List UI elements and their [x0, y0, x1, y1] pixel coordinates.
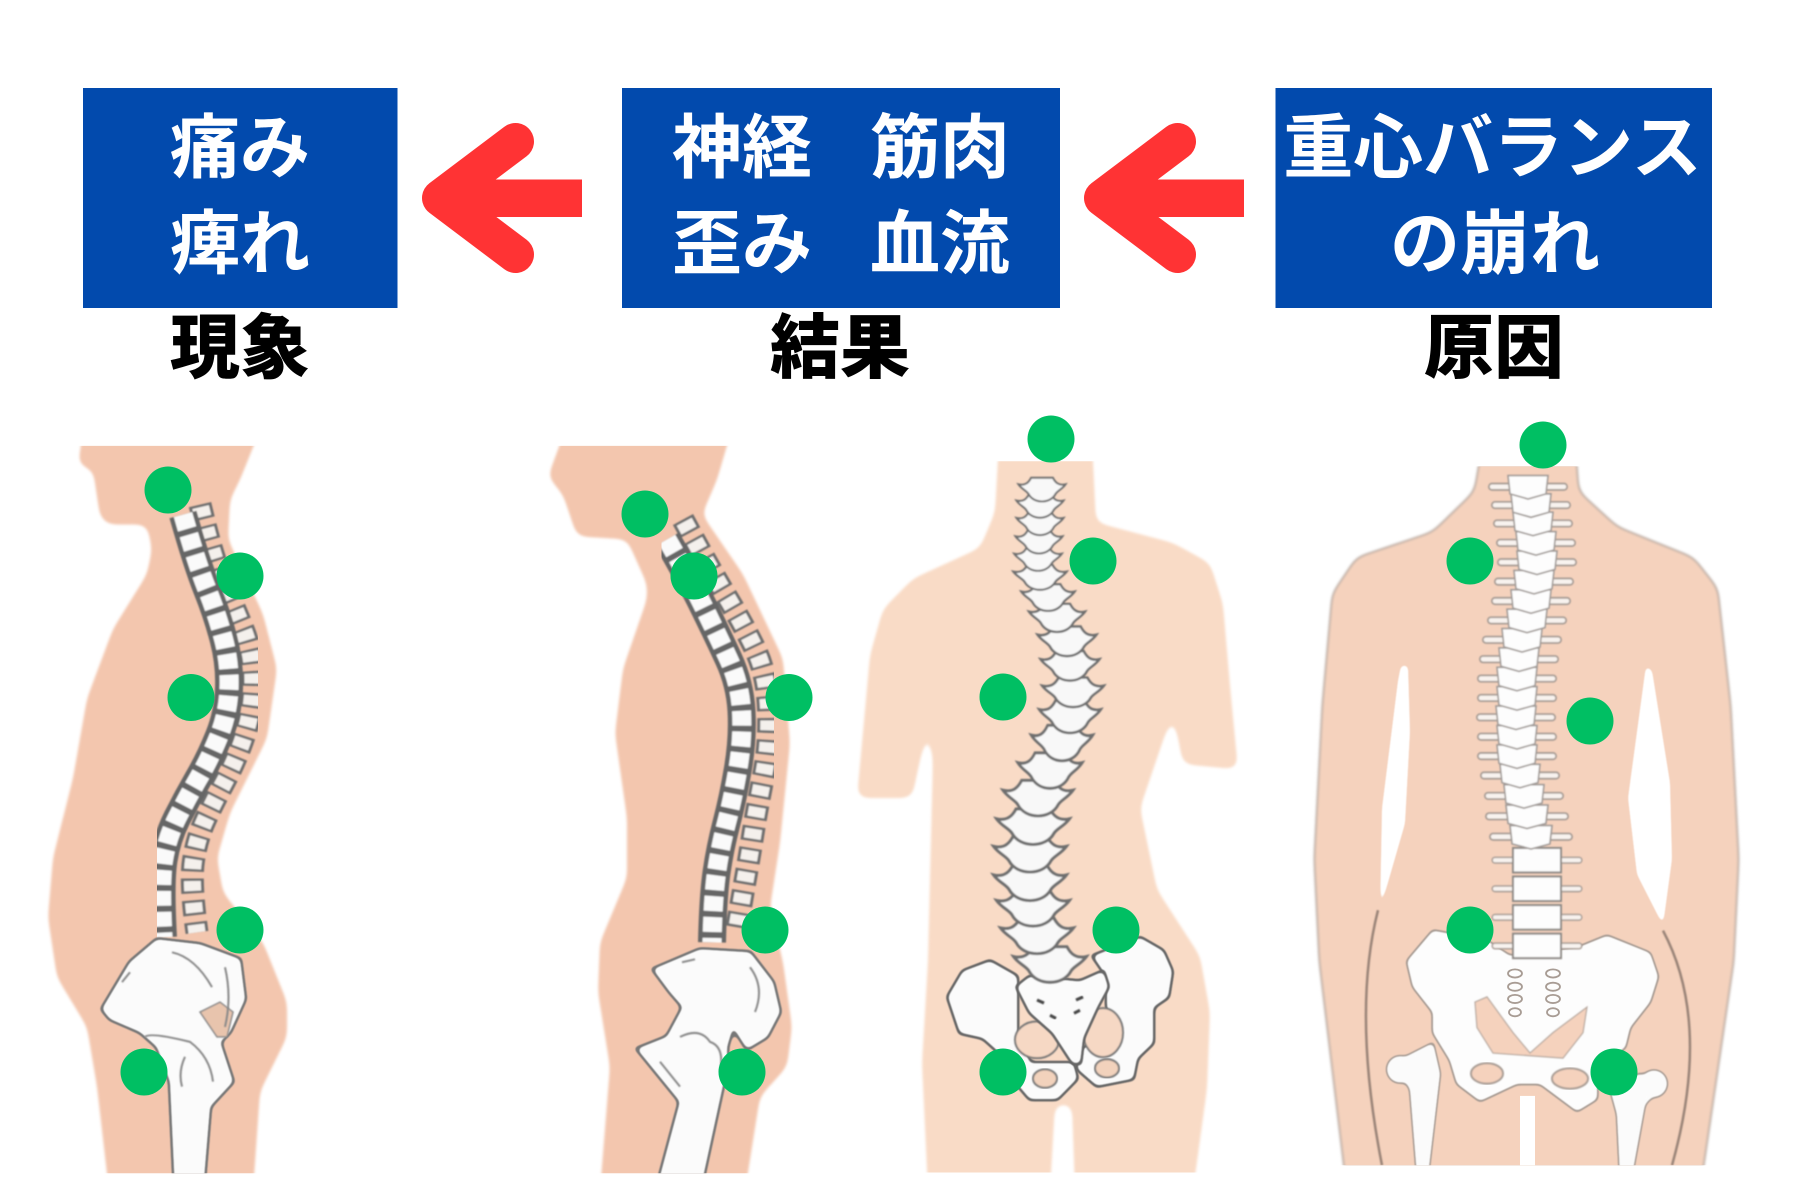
pelvis and femurs [1387, 931, 1667, 1176]
spine [162, 505, 253, 937]
arrow: result to phenomenon [440, 142, 582, 254]
box: result [622, 88, 1060, 308]
text: collapse: の崩れ [1390, 205, 1600, 283]
markers: green dots, figure 2 [622, 490, 812, 1096]
text: nerve, muscle [672, 109, 1010, 187]
text: distortion, blood flow [672, 205, 1010, 283]
body silhouette [1315, 451, 1738, 1186]
arrow: cause to result [1102, 142, 1244, 254]
markers: green dots, figure 1 [120, 466, 264, 1096]
figure: side view, sway back [48, 425, 287, 1191]
box: cause [1276, 88, 1712, 308]
text: nerve, muscle: 神経 [672, 109, 812, 187]
spine [994, 478, 1104, 982]
pelvis and femur [102, 939, 245, 1191]
text: distortion, blood flow: 血流 [870, 205, 1010, 283]
label: phenomenon: 現象 [170, 309, 310, 387]
figure: back view, tilted [1315, 451, 1738, 1186]
pelvis [948, 938, 1172, 1099]
body silhouette [857, 441, 1238, 1191]
figure: side view, kyphosis [548, 425, 792, 1191]
hip lines [1366, 910, 1690, 1165]
pelvis and femur [637, 949, 780, 1191]
body silhouette [48, 425, 287, 1191]
box: phenomenon [83, 88, 398, 308]
spine [667, 520, 769, 942]
text: nerve, muscle: 筋肉 [870, 109, 1010, 187]
spine [1480, 476, 1579, 958]
text: center of gravity balance: 重心バランス [1283, 109, 1702, 187]
text: pain: 痛み [170, 109, 310, 187]
figure: back view, scoliosis [857, 441, 1238, 1191]
label: result: 結果 [770, 309, 910, 387]
body silhouette [548, 425, 792, 1191]
text: numbness: 痺れ [170, 205, 310, 283]
markers: green dots, figure 4 [1446, 422, 1638, 1096]
text: distortion, blood flow: 歪み [672, 205, 812, 283]
arm gaps [1380, 665, 1672, 926]
label: cause: 原因 [1424, 309, 1564, 387]
markers: green dots, figure 3 [980, 416, 1140, 1096]
